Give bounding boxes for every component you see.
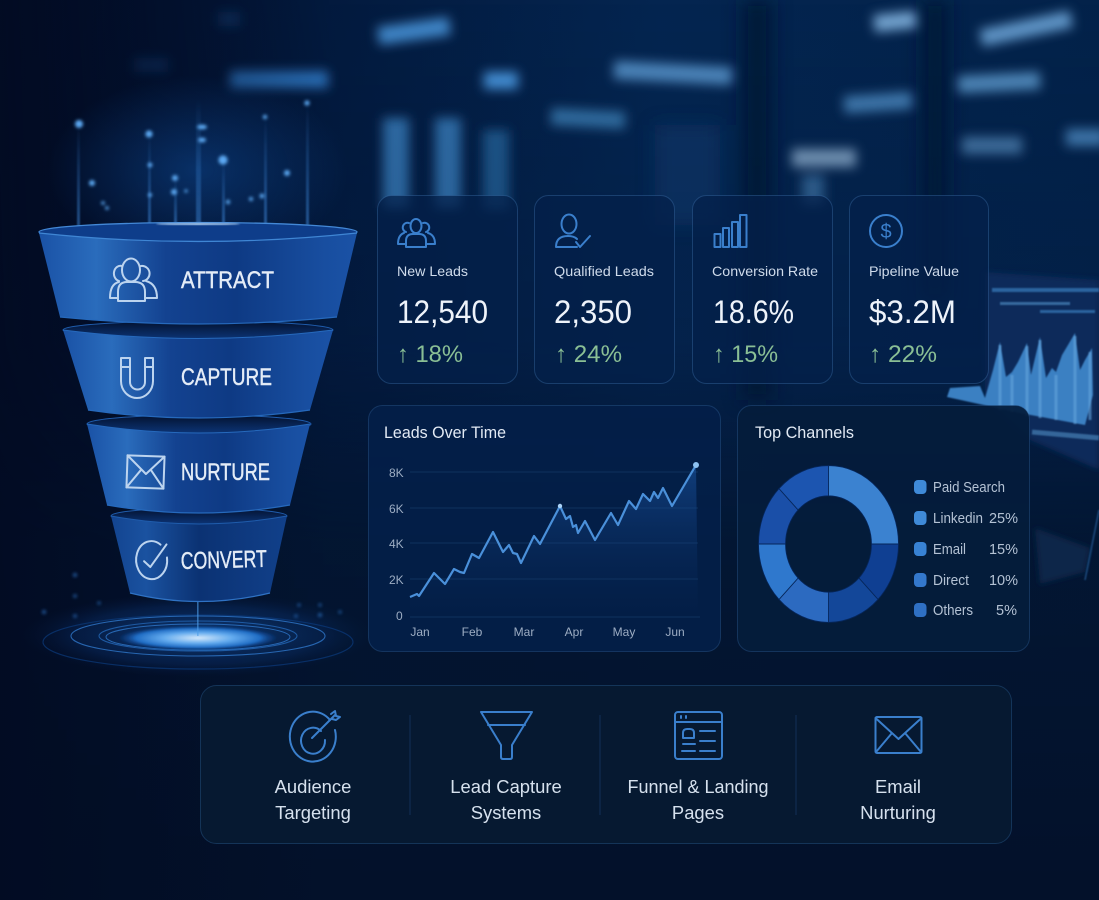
value: 18.6% bbox=[713, 294, 794, 330]
legend: 25% bbox=[989, 511, 1018, 527]
background: laptop with chart bbox=[947, 272, 1099, 584]
label: Qualified Leads bbox=[554, 263, 654, 279]
icon: magnet bbox=[121, 358, 153, 398]
icon: people group bbox=[398, 219, 435, 247]
y axis labels: 2K bbox=[389, 573, 404, 587]
glowing platform bbox=[23, 573, 373, 677]
service: funnel and landing pages bbox=[628, 712, 768, 823]
y axis labels: 0 bbox=[396, 609, 403, 623]
label: nurture: NURTURE bbox=[181, 459, 270, 486]
y axis labels: 4K bbox=[389, 537, 404, 551]
funnel stage: nurture bbox=[87, 415, 311, 513]
label: Lead Capture bbox=[450, 776, 562, 797]
x axis labels: Jun bbox=[665, 625, 685, 639]
panel: services bbox=[200, 686, 1012, 844]
service: audience targeting bbox=[275, 711, 351, 823]
label: attract: ATTRACT bbox=[181, 267, 274, 294]
panel: leads over time bbox=[368, 406, 720, 652]
kpi card: qualified leads bbox=[534, 196, 674, 384]
label: Audience bbox=[275, 776, 351, 797]
y axis labels bbox=[389, 466, 404, 623]
donut chart bbox=[758, 466, 898, 622]
legend: Direct bbox=[933, 573, 969, 589]
legend: 10% bbox=[989, 573, 1018, 589]
funnel bbox=[39, 222, 357, 602]
kpi card: pipeline value bbox=[850, 196, 988, 384]
change: ↑ 18% bbox=[397, 341, 463, 368]
kpi card: conversion rate bbox=[692, 196, 832, 384]
service: email nurturing bbox=[860, 717, 936, 823]
icon: envelope bbox=[876, 717, 922, 753]
x axis labels: Jan bbox=[410, 625, 430, 639]
legend: Paid Search bbox=[933, 480, 1005, 496]
service: audience targeting: Targeting bbox=[275, 802, 351, 823]
icon: person check bbox=[556, 214, 590, 247]
legend: 5% bbox=[996, 603, 1017, 619]
legend: Others bbox=[933, 603, 973, 619]
value: 2,350 bbox=[554, 294, 632, 330]
panel: top channels bbox=[738, 406, 1030, 652]
change: ↑ 15% bbox=[713, 341, 778, 368]
icon: dollar coin bbox=[870, 215, 902, 247]
service: email nurturing: Nurturing bbox=[860, 802, 936, 823]
legend: 15% bbox=[989, 542, 1018, 558]
label: Funnel & Landing bbox=[628, 776, 768, 797]
kpi card: new leads bbox=[378, 196, 518, 384]
value: 12,540 bbox=[397, 294, 488, 330]
x axis labels: May bbox=[613, 625, 635, 639]
icon: dollar coin: $ bbox=[880, 221, 892, 243]
icon: people bbox=[110, 258, 157, 301]
label: New Leads bbox=[397, 263, 468, 279]
service: lead capture systems: Systems bbox=[471, 802, 541, 823]
change: ↑ 22% bbox=[869, 341, 937, 368]
x axis labels: Apr bbox=[565, 625, 583, 639]
icon: envelope bbox=[126, 455, 165, 489]
change: ↑ 24% bbox=[555, 341, 622, 368]
service: funnel and landing pages: Pages bbox=[672, 802, 724, 823]
legend: Email bbox=[933, 542, 966, 558]
heading: Top Channels bbox=[755, 423, 854, 442]
funnel stage: attract bbox=[39, 222, 357, 324]
icon: bars bbox=[714, 215, 746, 247]
x axis labels bbox=[410, 625, 685, 639]
icon: target bbox=[290, 711, 340, 762]
legend bbox=[914, 480, 1018, 619]
legend: Linkedin bbox=[933, 511, 983, 527]
particles above funnel bbox=[48, 75, 348, 265]
icon: check circle bbox=[135, 541, 168, 580]
funnel stage: capture bbox=[63, 321, 333, 418]
heading: Leads Over Time bbox=[384, 423, 506, 442]
y axis labels: 6K bbox=[389, 502, 404, 516]
icon: web page bbox=[675, 712, 722, 759]
funnel stage: convert bbox=[111, 508, 287, 602]
label: Pipeline Value bbox=[869, 263, 959, 279]
value: $3.2M bbox=[869, 294, 956, 330]
icon: funnel bbox=[481, 712, 532, 759]
label: Conversion Rate bbox=[712, 263, 818, 279]
x axis labels: Mar bbox=[514, 625, 534, 639]
y axis labels: 8K bbox=[389, 466, 404, 480]
label: capture: CAPTURE bbox=[181, 364, 272, 391]
service: lead capture systems bbox=[450, 712, 562, 823]
x axis labels: Feb bbox=[462, 625, 483, 639]
line chart bbox=[410, 462, 699, 617]
label: Email bbox=[875, 776, 921, 797]
label: convert: CONVERT bbox=[180, 546, 267, 575]
